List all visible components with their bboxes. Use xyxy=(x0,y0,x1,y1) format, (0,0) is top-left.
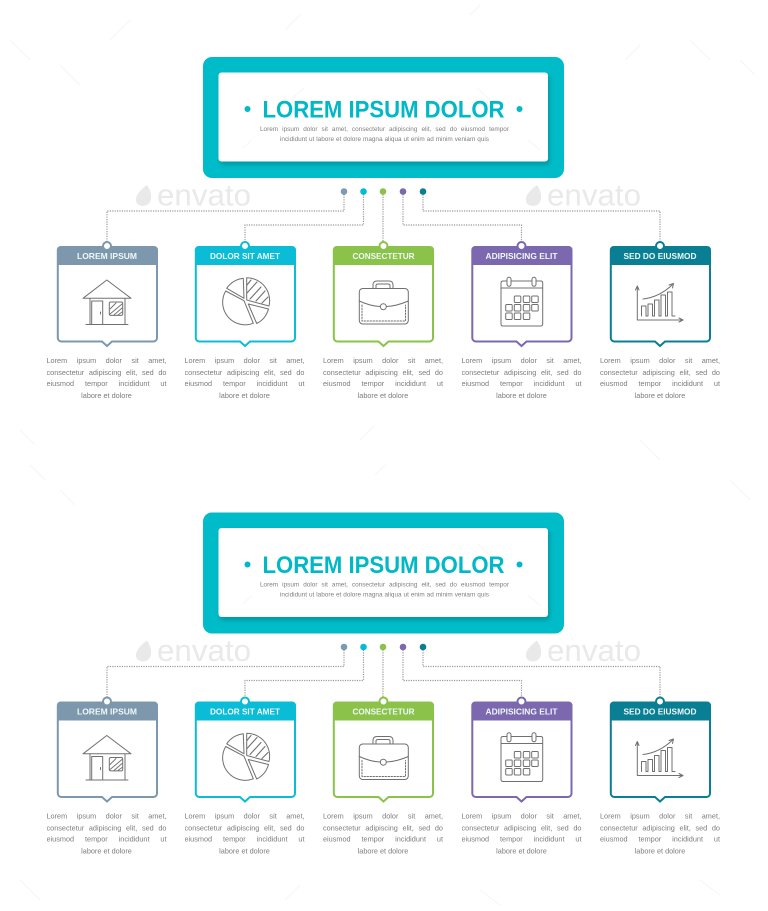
subtitle xyxy=(260,580,509,600)
text: consectetur: eiusmod tempor incididunt ut xyxy=(323,834,443,844)
text: lorem ipsum xyxy=(46,355,166,403)
panel: adipisicing elit xyxy=(462,698,582,858)
watermark: envato left: envato xyxy=(157,633,251,668)
icon: calendar xyxy=(501,733,543,782)
title bullet right xyxy=(516,562,522,568)
title bullet left xyxy=(244,562,250,568)
text: dolor sit amet: labore et dolore xyxy=(219,390,270,400)
text: sed do eiusmod: consectetur adipiscing elit, sed do xyxy=(600,368,720,376)
panel: title card xyxy=(203,512,564,634)
text: dolor sit amet: consectetur adipiscing elit, sed do xyxy=(184,368,304,376)
text: lorem ipsum: labore et dolore xyxy=(81,846,132,855)
watermark: envato right: envato xyxy=(547,178,641,212)
panel: adipisicing elit xyxy=(462,242,582,403)
text: lorem ipsum: Lorem ipsum dolor sit amet, xyxy=(46,356,166,365)
text: lorem ipsum: consectetur adipiscing elit, sed do xyxy=(46,823,166,832)
text: consectetur: consectetur adipiscing elit, sed do xyxy=(323,823,443,832)
connectors xyxy=(107,644,660,700)
icon: growth chart xyxy=(636,739,683,778)
title bullet right xyxy=(516,106,522,112)
text: consectetur: Lorem ipsum dolor sit amet, xyxy=(323,356,443,365)
icon: house xyxy=(83,280,131,324)
icon: calendar xyxy=(501,277,543,326)
text: dolor sit amet xyxy=(184,810,304,858)
text: dolor sit amet: labore et dolore xyxy=(219,846,270,855)
icon: pie chart xyxy=(223,278,270,325)
text: adipisicing elit: consectetur adipiscing elit, sed do xyxy=(462,823,582,832)
text: sed do eiusmod: consectetur adipiscing elit, sed do xyxy=(600,823,720,832)
panel: lorem ipsum xyxy=(46,698,166,858)
panel: consectetur xyxy=(323,698,443,858)
text: sed do eiusmod xyxy=(600,355,720,403)
text: lorem ipsum: Lorem ipsum dolor sit amet, xyxy=(46,812,166,820)
infographic: bottom xyxy=(46,512,720,858)
text: dolor sit amet: Lorem ipsum dolor sit amet, xyxy=(184,356,304,365)
text: adipisicing elit xyxy=(462,355,582,403)
text: lorem ipsum xyxy=(46,810,166,858)
infographic: top xyxy=(46,57,720,403)
text: adipisicing elit: eiusmod tempor incididunt ut xyxy=(462,379,582,388)
panel: lorem ipsum: LOREM IPSUM xyxy=(77,251,137,261)
panel: sed do eiusmod xyxy=(600,242,720,403)
title: LOREM IPSUM DOLOR xyxy=(262,96,504,124)
icon: pie chart xyxy=(223,733,270,780)
subtitle: Lorem ipsum dolor sit amet, consectetur adipiscing elit, sed do eiusmod tempor xyxy=(260,582,509,588)
text: consectetur xyxy=(323,810,443,858)
text: lorem ipsum: labore et dolore xyxy=(81,390,132,400)
icon: briefcase xyxy=(359,736,408,780)
text: adipisicing elit xyxy=(462,810,582,858)
text: dolor sit amet: consectetur adipiscing elit, sed do xyxy=(184,823,304,832)
panel: title card xyxy=(203,57,564,178)
panel: adipisicing elit: ADIPISICING ELIT xyxy=(486,706,558,716)
icon: briefcase xyxy=(359,281,408,324)
panel: consectetur: CONSECTETUR xyxy=(352,706,414,716)
text: consectetur: labore et dolore xyxy=(358,846,408,855)
icon: growth chart xyxy=(636,284,683,322)
text: sed do eiusmod: eiusmod tempor incididunt ut xyxy=(600,379,720,388)
panel: sed do eiusmod: SED DO EIUSMOD xyxy=(624,706,696,716)
text: lorem ipsum: consectetur adipiscing elit, sed do xyxy=(46,368,166,376)
text: consectetur: consectetur adipiscing elit, sed do xyxy=(323,368,443,376)
text: consectetur: Lorem ipsum dolor sit amet, xyxy=(323,812,443,820)
subtitle: incididunt ut labore et dolore magna aliqua ut enim ad minim veniam quis xyxy=(280,591,489,598)
watermark: envato left: envato xyxy=(157,178,251,212)
panel: sed do eiusmod: SED DO EIUSMOD xyxy=(624,251,696,261)
text: sed do eiusmod: labore et dolore xyxy=(635,390,685,400)
panel: dolor sit amet xyxy=(184,698,304,858)
text: adipisicing elit: Lorem ipsum dolor sit amet, xyxy=(462,812,582,820)
subtitle: incididunt ut labore et dolore magna aliqua ut enim ad minim veniam quis xyxy=(280,136,489,142)
text: lorem ipsum: eiusmod tempor incididunt ut xyxy=(46,379,166,388)
text: dolor sit amet: eiusmod tempor incididunt ut xyxy=(184,834,304,844)
title: LOREM IPSUM DOLOR xyxy=(262,552,504,579)
text: lorem ipsum: eiusmod tempor incididunt ut xyxy=(46,834,166,844)
panel: lorem ipsum: LOREM IPSUM xyxy=(77,706,137,716)
panel: dolor sit amet: DOLOR SIT AMET xyxy=(210,251,281,261)
panel: lorem ipsum xyxy=(46,242,166,403)
panel: consectetur xyxy=(323,242,443,403)
panel: dolor sit amet xyxy=(184,242,304,403)
connectors xyxy=(107,188,660,244)
panel: consectetur: CONSECTETUR xyxy=(352,251,414,261)
panel: adipisicing elit: ADIPISICING ELIT xyxy=(486,251,558,261)
text: sed do eiusmod: labore et dolore xyxy=(635,846,685,855)
text: dolor sit amet xyxy=(184,355,304,403)
text: adipisicing elit: eiusmod tempor incididunt ut xyxy=(462,834,582,844)
subtitle xyxy=(260,125,509,145)
text: sed do eiusmod: Lorem ipsum dolor sit amet, xyxy=(600,356,720,365)
text: consectetur: eiusmod tempor incididunt ut xyxy=(323,379,443,388)
text: consectetur: labore et dolore xyxy=(358,390,408,400)
text: adipisicing elit: labore et dolore xyxy=(496,390,547,400)
panel: dolor sit amet: DOLOR SIT AMET xyxy=(210,706,281,716)
text: sed do eiusmod xyxy=(600,810,720,858)
title bullet left xyxy=(244,106,250,112)
text: sed do eiusmod: eiusmod tempor incididunt ut xyxy=(600,834,720,844)
text: adipisicing elit: labore et dolore xyxy=(496,846,547,855)
text: dolor sit amet: Lorem ipsum dolor sit amet, xyxy=(184,812,304,820)
text: dolor sit amet: eiusmod tempor incididunt ut xyxy=(184,379,304,388)
watermark: envato right: envato xyxy=(547,633,641,668)
text: adipisicing elit: Lorem ipsum dolor sit amet, xyxy=(462,356,582,365)
subtitle: Lorem ipsum dolor sit amet, consectetur adipiscing elit, sed do eiusmod tempor xyxy=(260,126,509,133)
panel: sed do eiusmod xyxy=(600,698,720,858)
text: sed do eiusmod: Lorem ipsum dolor sit amet, xyxy=(600,812,720,820)
icon: house xyxy=(83,736,131,780)
text: consectetur xyxy=(323,355,443,403)
text: adipisicing elit: consectetur adipiscing elit, sed do xyxy=(462,368,582,376)
